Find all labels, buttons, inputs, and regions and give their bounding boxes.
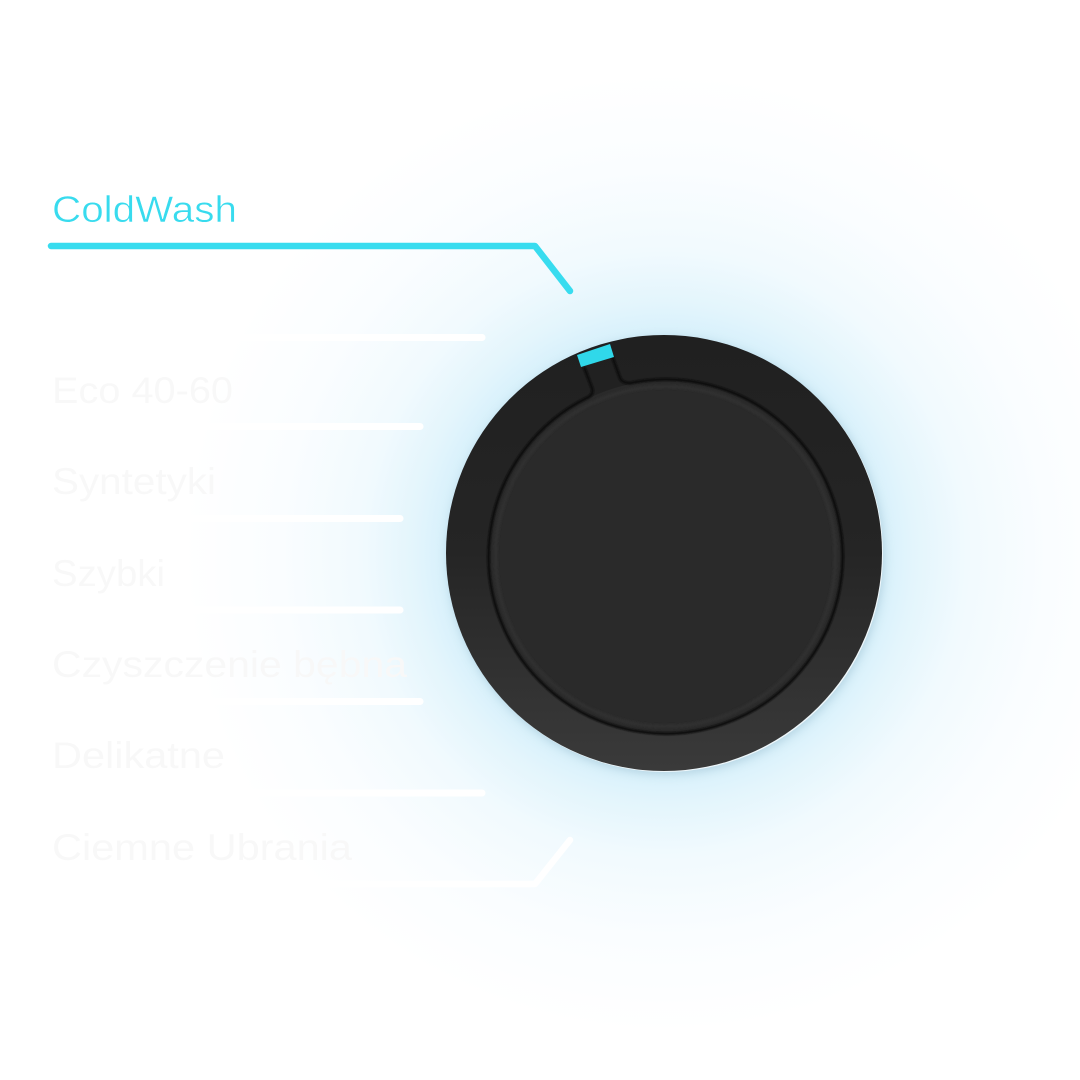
- line: Czyszczenie bębna: [51, 698, 420, 705]
- label: Eco 40-60: Eco 40-60: [52, 370, 233, 411]
- pointer indicator: [577, 344, 614, 367]
- line: top: [51, 334, 482, 341]
- label: Czyszczenie bębna: Czyszczenie bębna: [52, 644, 407, 685]
- inactive program lines and labels: [51, 338, 570, 884]
- label: Syntetyki: Syntetyki: [52, 461, 216, 502]
- active label: ColdWash: [51, 189, 570, 291]
- line: Syntetyki: [51, 515, 400, 522]
- line: Delikatne: [51, 790, 482, 796]
- dial centre disc: [490, 380, 842, 732]
- dial knob: [446, 335, 884, 774]
- dial inner ridge: [496, 386, 836, 726]
- label: Szybki: Szybki: [52, 553, 165, 594]
- dial groove with pointer notch: [489, 356, 843, 733]
- line: Szybki: [51, 606, 400, 614]
- line: Eco 40-60: [51, 423, 420, 430]
- label: Ciemne Ubrania: Ciemne Ubrania: [52, 827, 352, 868]
- active label: ColdWash: ColdWash: [52, 189, 237, 230]
- line: Ciemne Ubrania: [51, 840, 570, 884]
- label: Delikatne: Delikatne: [52, 735, 225, 776]
- dial outer ring: [446, 335, 882, 771]
